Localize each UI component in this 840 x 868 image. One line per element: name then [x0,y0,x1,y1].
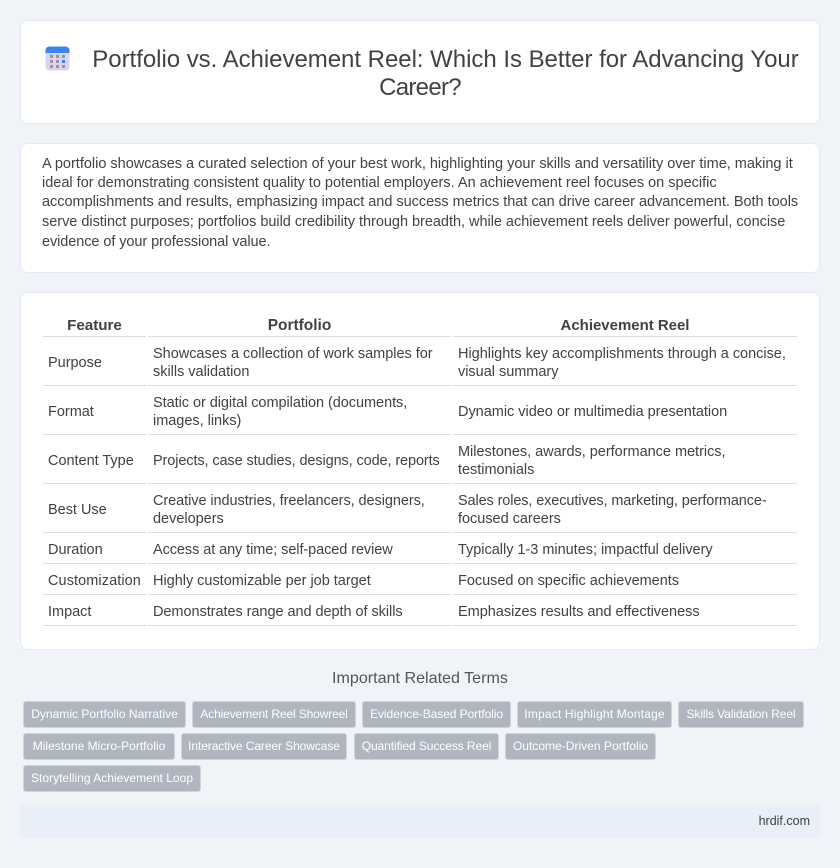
table header: Feature [67,317,122,334]
row: Impact: Emphasizes results and effectiveness [458,604,700,620]
table header: Portfolio [268,317,331,334]
row: Customization [48,573,679,589]
heading: related terms: Important Related Terms [332,669,508,687]
row: Duration [48,542,713,558]
tag [23,733,175,760]
row: Impact: Demonstrates range and depth of skills [153,604,403,620]
row: Purpose: Highlights key accomplishments through a concise, [458,346,786,362]
tag [23,765,201,792]
row: Content Type [48,444,726,478]
tag [354,733,499,760]
row: Format: Dynamic video or multimedia presentation [458,404,727,420]
panel: intro text [20,143,820,273]
intro paragraph: serve distinct purposes; portfolios build credibility through breadth, while achievement reels deliver powerful, concise [42,214,785,230]
row: Best Use: Sales roles, executives, marketing, performance- [458,493,767,509]
tag [23,701,186,728]
icon: calendar [46,46,70,70]
tag: Milestone Micro-Portfolio [33,739,165,753]
row: Best Use: focused careers [458,511,561,527]
tag [505,733,656,760]
row: Content Type: Content Type [48,453,134,469]
tag: Achievement Reel Showreel [200,707,348,721]
title: Career? [379,74,461,101]
tag: Dynamic Portfolio Narrative [31,707,178,721]
intro paragraph: accomplishments and results, emphasizing impact and success metrics that can drive career advancement. Both tools [42,194,798,210]
tag [517,701,672,728]
intro paragraph: A portfolio showcases a curated selection of your best work, highlighting your skills and versatility over time, making it [42,156,793,172]
panel: comparison table [20,292,820,650]
tag [678,701,804,728]
tag: Impact Highlight Montage [524,707,665,721]
title: Portfolio vs. Achievement Reel: Which Is Better for Advancing Your [92,46,799,73]
panel: header [20,20,820,124]
row: Purpose: Purpose [48,355,102,371]
row: Purpose: Showcases a collection of work samples for [153,346,433,362]
row: Format: images, links) [153,413,241,429]
row: Duration: Typically 1-3 minutes; impactful delivery [458,542,713,558]
tag: Evidence-Based Portfolio [370,707,503,721]
row: Format: Format [48,404,94,420]
tag: Outcome-Driven Portfolio [513,739,648,753]
row: Customization: Highly customizable per job target [153,573,371,589]
footer [20,805,820,838]
row: Impact [48,604,700,620]
row: Duration: Duration [48,542,103,558]
tag [192,701,356,728]
row: Purpose [48,346,786,380]
row: Content Type: Milestones, awards, performance metrics, [458,444,726,460]
row: Content Type: Projects, case studies, designs, code, reports [153,453,440,469]
title [92,46,799,101]
row: Format: Static or digital compilation (documents, [153,395,407,411]
tag: Interactive Career Showcase [188,739,340,753]
row: Best Use: Best Use [48,502,107,518]
row: Best Use: developers [153,511,224,527]
tag [181,733,347,760]
intro paragraph: evidence of your professional value. [42,234,270,250]
tag [362,701,511,728]
row: Duration: Access at any time; self-paced review [153,542,393,558]
row: Best Use [48,493,767,527]
row: Best Use: Creative industries, freelancers, designers, [153,493,425,509]
intro paragraph: ideal for demonstrating consistent quality to potential employers. An achievement reel focuses on specific [42,175,717,191]
row: Content Type: testimonials [458,462,534,478]
row: Format [48,395,727,429]
row: Customization: Customization [48,573,141,589]
intro paragraph [42,156,798,250]
tag group [23,701,804,792]
footer source: hrdif.com [759,814,810,828]
tag: Skills Validation Reel [687,707,795,721]
comparison table [43,317,797,626]
row: Impact: Impact [48,604,91,620]
row: Purpose: skills validation [153,364,249,380]
table header [67,317,689,334]
tag: Quantified Success Reel [362,739,491,753]
table header: Achievement Reel [561,317,689,334]
row: Customization: Focused on specific achievements [458,573,679,589]
row: Purpose: visual summary [458,364,558,380]
tag: Storytelling Achievement Loop [31,771,193,785]
